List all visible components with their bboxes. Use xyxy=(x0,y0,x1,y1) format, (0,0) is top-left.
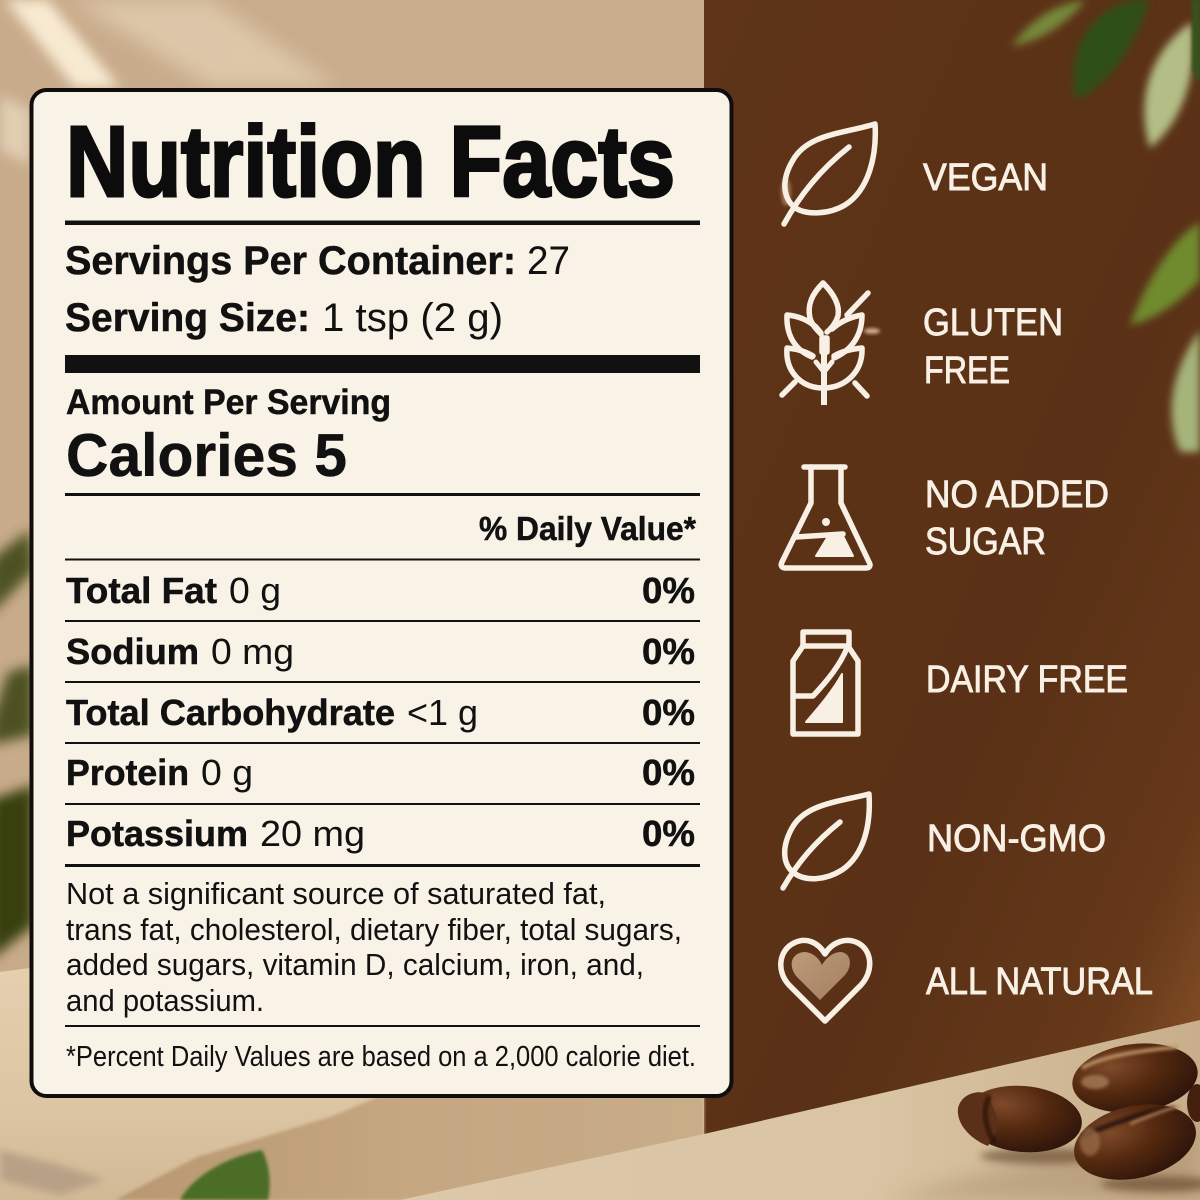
icon: non-gmo leaf xyxy=(783,794,869,888)
row: potassium xyxy=(66,813,695,854)
title: Nutrition Facts xyxy=(66,106,675,218)
row: sodium: 0 mg xyxy=(211,631,294,672)
bean left xyxy=(958,1081,1085,1157)
serving size: Serving Size: xyxy=(65,296,310,340)
icon: dairy free carton xyxy=(793,632,858,734)
footnote: not a significant source: and potassium. xyxy=(66,983,264,1018)
row: protein: 0 g xyxy=(201,752,253,793)
panel: nutrition facts label xyxy=(32,90,732,1096)
wheat outline xyxy=(782,283,868,405)
row: protein xyxy=(66,752,695,793)
rule xyxy=(65,864,700,867)
label: vegan: VEGAN xyxy=(923,157,1048,199)
servings per container: 27 xyxy=(527,239,570,283)
footnote: not a significant source: trans fat, cholesterol, dietary fiber, total sugars, xyxy=(66,912,682,947)
label: no added sugar: SUGAR xyxy=(925,521,1046,563)
row: total fat: 0 g xyxy=(229,570,281,611)
label: gluten free xyxy=(923,302,1063,392)
bean shadows xyxy=(980,1148,1200,1192)
rule xyxy=(65,220,700,225)
row: total carbohydrate: <1 g xyxy=(407,692,478,733)
label: gluten free: FREE xyxy=(924,350,1010,392)
row: total carbohydrate xyxy=(66,692,695,733)
background: bottom leaf xyxy=(180,1150,270,1200)
row: sodium: 0% xyxy=(642,631,695,672)
icon: all natural heart xyxy=(781,940,870,1021)
daily value header: % Daily Value* xyxy=(479,510,696,547)
label: all natural: ALL NATURAL xyxy=(926,961,1153,1003)
serving size: 1 tsp (2 g) xyxy=(322,296,503,340)
background: stone front face xyxy=(115,1090,704,1200)
leaf outline xyxy=(784,124,875,224)
background: beige wall xyxy=(0,0,704,1000)
leaf highlight xyxy=(781,178,791,206)
rule xyxy=(65,558,700,560)
row: total fat xyxy=(66,570,695,611)
icon: no added sugar flask xyxy=(781,467,870,568)
footnote: percent daily values: *Percent Daily Values are based on a 2,000 calorie diet. xyxy=(66,1041,696,1073)
coffee beans xyxy=(958,1037,1200,1192)
amount per serving: Amount Per Serving xyxy=(66,383,391,422)
icon: vegan leaf xyxy=(781,124,875,224)
row: total carbohydrate: 0% xyxy=(642,692,695,733)
rule xyxy=(65,681,700,683)
row: potassium: 20 mg xyxy=(260,813,365,854)
footnote: not a significant source: added sugars, vitamin D, calcium, iron, and, xyxy=(66,947,644,982)
row: sodium xyxy=(66,631,695,672)
background: slab shadow xyxy=(880,1120,1200,1200)
row: potassium: 0% xyxy=(642,813,695,854)
serving size xyxy=(65,296,503,340)
row: total fat: Total Fat xyxy=(66,570,217,611)
background: brown wall xyxy=(704,0,1200,1135)
label: dairy free: DAIRY FREE xyxy=(926,659,1128,701)
rule xyxy=(65,1025,700,1027)
row: potassium: Potassium xyxy=(66,813,248,854)
background: top right leaves xyxy=(1012,0,1200,452)
row: protein: Protein xyxy=(66,752,189,793)
servings per container: Servings Per Container: xyxy=(65,239,516,283)
footnote: not a significant source xyxy=(66,876,682,1018)
label: no added sugar: NO ADDED xyxy=(925,474,1109,516)
label: no added sugar xyxy=(925,474,1109,563)
background: sunlight streaks xyxy=(0,0,340,165)
label: gluten free: GLUTEN xyxy=(923,302,1063,344)
rule xyxy=(65,620,700,622)
row: protein: 0% xyxy=(642,752,695,793)
background: stone ledge left xyxy=(0,968,704,1200)
footnote: not a significant source: Not a significant source of saturated fat, xyxy=(66,876,606,911)
wheat glint xyxy=(864,328,880,334)
rule xyxy=(65,803,700,805)
calories: Calories 5 xyxy=(66,422,347,489)
background: stone slab right xyxy=(400,1020,1200,1200)
bean front right xyxy=(1066,1093,1200,1191)
panel card xyxy=(32,90,732,1096)
icon: gluten free wheat xyxy=(782,283,880,405)
row: total fat: 0% xyxy=(642,570,695,611)
row: sodium: Sodium xyxy=(66,631,199,672)
background: ledge shadow xyxy=(0,1150,105,1195)
row: total carbohydrate: Total Carbohydrate xyxy=(66,692,395,733)
background: left plant shadow xyxy=(0,530,34,960)
label: non-gmo: NON-GMO xyxy=(927,818,1106,860)
bean back right xyxy=(1068,1037,1200,1122)
rule xyxy=(65,493,700,496)
rule xyxy=(65,742,700,744)
thick bar xyxy=(65,355,700,373)
